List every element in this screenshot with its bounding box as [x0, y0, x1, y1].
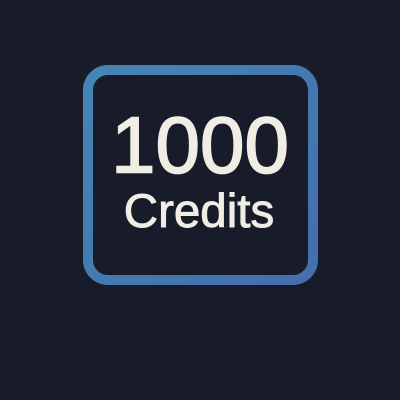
value: 1000: 1000	[111, 100, 289, 190]
label: Credits: Credits	[124, 185, 274, 238]
panel: rounded gradient frame	[88, 70, 313, 280]
